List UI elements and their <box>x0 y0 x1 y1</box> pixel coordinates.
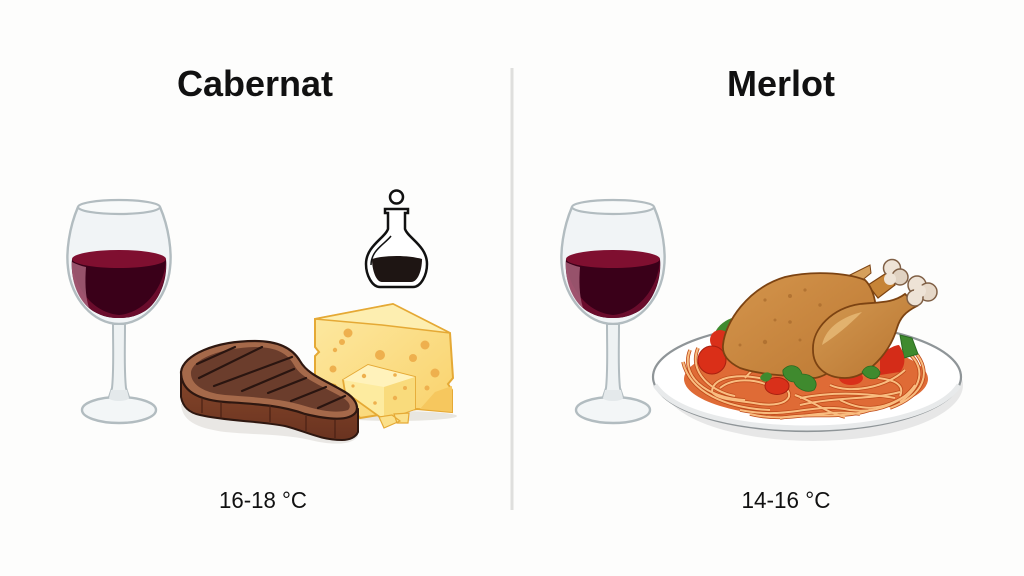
icon: Merlot wine glass <box>561 200 665 423</box>
divider <box>510 68 514 510</box>
title: Merlot: Merlot <box>727 63 835 104</box>
chicken body <box>723 273 876 378</box>
icon: grilled steak <box>181 341 358 444</box>
temperature: Merlot: 14-16 °C <box>742 487 830 513</box>
far drumstick <box>868 272 895 298</box>
spaghetti <box>684 341 928 417</box>
icon: Cabernet wine glass <box>67 200 171 423</box>
temperature: Cabernat: 16-18 °C <box>219 487 307 513</box>
herbs front <box>783 366 816 391</box>
title: Cabernat: Cabernat <box>177 63 333 104</box>
icon: plate of spaghetti with roast chicken <box>653 260 963 441</box>
icon: cheese wedge <box>315 304 457 428</box>
icon: decanter <box>366 190 427 287</box>
near drumstick <box>813 294 917 378</box>
tomatoes <box>710 330 730 350</box>
herbs behind <box>714 318 734 340</box>
plate <box>663 329 963 441</box>
